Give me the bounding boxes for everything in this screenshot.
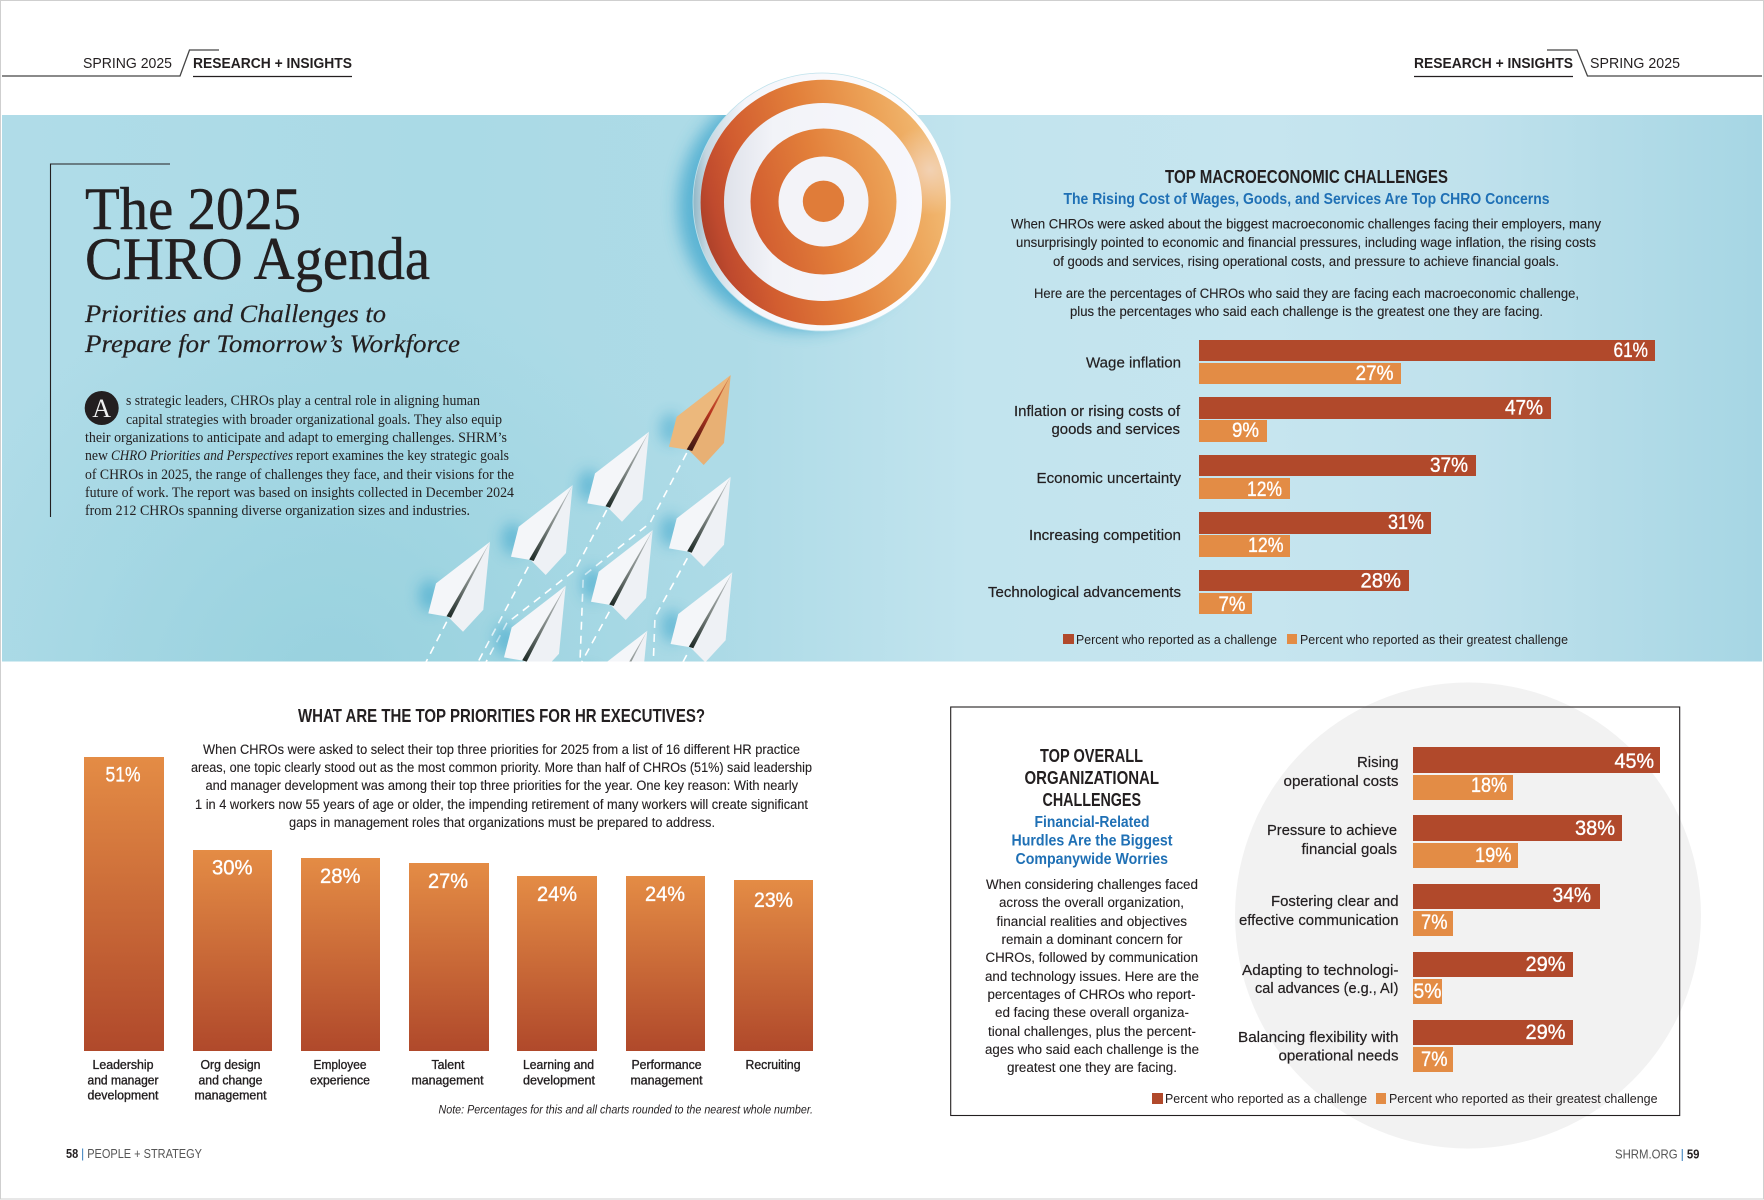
column: talent management: Talent <box>432 1058 465 1072</box>
article body: future of work. The report was based on insights collected in December 2024 <box>85 485 515 501</box>
column chart <box>84 757 813 1102</box>
column: leadership: development <box>88 1088 159 1102</box>
row: economic uncertainty: 37% <box>1430 454 1468 477</box>
description: When considering challenges faced <box>986 877 1198 892</box>
description <box>1011 216 1601 319</box>
column: org design: and change <box>198 1074 263 1088</box>
column: performance management: Performance <box>632 1058 702 1072</box>
column: leadership: and manager <box>88 1074 158 1088</box>
description: CHROs, followed by communication <box>986 950 1198 965</box>
note: Note: Percentages for this and all charts rounded to the nearest whole number. <box>438 1104 813 1116</box>
subtitle: Prepare for Tomorrow’s Workforce <box>84 331 460 358</box>
row: adapting to technological advances <box>1242 952 1573 1004</box>
column: learning and development: 24% <box>537 883 577 906</box>
column: leadership: 51% <box>106 764 140 786</box>
description: plus the percentages who said each challenge is the greatest one they are facing. <box>1070 304 1543 319</box>
row: technological advancements: 28% <box>1360 570 1401 592</box>
column: employee experience <box>301 858 380 1088</box>
legend: Percent who reported as their greatest challenge <box>1389 1092 1658 1106</box>
icon: target bullseye <box>678 73 951 331</box>
row: increasing competition: 12% <box>1248 534 1284 557</box>
decorative gray circle <box>1235 682 1701 1148</box>
legend: Percent who reported as their greatest challenge <box>1300 633 1568 647</box>
column: talent management: 27% <box>428 870 468 893</box>
bar chart: macroeconomic <box>988 339 1655 616</box>
column: learning and development: Learning and <box>523 1058 594 1072</box>
row: pressure to achieve financial goals: Pressure to achieve <box>1267 823 1397 839</box>
column: org design: 30% <box>212 856 252 880</box>
column: learning and development: development <box>523 1074 596 1088</box>
row: economic uncertainty: 12% <box>1247 478 1282 501</box>
icon: drop cap <box>85 391 119 425</box>
header: right: RESEARCH + INSIGHTS <box>1414 56 1573 72</box>
description: across the overall organization, <box>999 895 1184 910</box>
heading: CHALLENGES <box>1042 789 1141 810</box>
subheading: Companywide Worries <box>1016 851 1168 868</box>
column: org design <box>193 850 272 1102</box>
description <box>985 877 1199 1075</box>
description: greatest one they are facing. <box>1007 1060 1177 1075</box>
description: gaps in management roles that organizations must be prepared to address. <box>289 815 715 830</box>
row: inflation or rising costs: 9% <box>1232 419 1259 442</box>
article body <box>85 393 515 519</box>
row: fostering clear and effective communication: 7% <box>1421 911 1448 934</box>
panel: top priorities for HR executives <box>84 705 813 1116</box>
description: areas, one topic clearly stood out as the most common priority. More than half of CHROs (51%) said leadership <box>191 760 812 775</box>
column: recruiting: 23% <box>754 889 793 912</box>
row: increasing competition <box>1029 511 1431 557</box>
article body: capital strategies with broader organizational goals. They also equip <box>126 412 502 428</box>
article body: s strategic leaders, CHROs play a central role in aligning human <box>126 393 481 409</box>
title: The 2025 <box>85 176 301 242</box>
description: 1 in 4 workers now 55 years of age or older, the impending retirement of many workers will create significant <box>195 797 808 812</box>
panel: top macroeconomic challenges <box>988 166 1655 647</box>
column: talent management: management <box>412 1074 484 1088</box>
row: fostering clear and effective communication <box>1239 884 1600 936</box>
column: org design: management <box>194 1088 267 1102</box>
row: balancing flexibility: Balancing flexibility with <box>1238 1030 1398 1046</box>
article body: from 212 CHROs spanning diverse organization sizes and industries. <box>85 503 470 519</box>
article body: new <box>85 448 108 464</box>
article body: CHRO Priorities and Perspectives <box>111 448 293 464</box>
row: rising operational costs: operational costs <box>1284 774 1398 790</box>
header: left: SPRING 2025 <box>83 56 172 72</box>
row: inflation or rising costs: goods and services <box>1052 422 1180 438</box>
column: leadership: Leadership <box>92 1058 154 1072</box>
panel border <box>951 707 1680 1116</box>
header: left: RESEARCH + INSIGHTS <box>193 56 352 72</box>
description: and manager development was among their top three priorities for the year. One key reason: With nearly <box>206 778 798 793</box>
row: inflation or rising costs <box>1014 396 1551 442</box>
title: CHRO Agenda <box>85 226 430 292</box>
article body: report examines the key strategic goals <box>296 448 509 464</box>
intro frame and article <box>50 164 515 519</box>
legend: Percent who reported as a challenge <box>1076 633 1277 647</box>
icon: paper planes with dashed flight paths <box>413 375 732 662</box>
row: adapting to technological advances: cal advances (e.g., AI) <box>1255 981 1398 997</box>
row: balancing flexibility: 29% <box>1526 1021 1566 1044</box>
description: ages who said each challenge is the <box>985 1042 1199 1057</box>
row: fostering clear and effective communication: Fostering clear and <box>1271 894 1398 910</box>
heading: TOP OVERALL <box>1040 745 1143 766</box>
row: wage inflation <box>1086 339 1655 385</box>
subheading <box>1012 814 1173 868</box>
row: pressure to achieve financial goals: financial goals <box>1302 842 1397 858</box>
header: left <box>2 50 352 76</box>
row: wage inflation: Wage inflation <box>1086 356 1181 372</box>
article body: of CHROs in 2025, the range of challenges they face, and their visions for the <box>85 467 514 483</box>
row: adapting to technological advances: Adapting to technologi- <box>1242 963 1399 979</box>
title <box>85 176 430 292</box>
row: balancing flexibility: operational needs <box>1278 1048 1398 1064</box>
heading: TOP MACROECONOMIC CHALLENGES <box>1165 166 1448 187</box>
heading <box>1024 745 1159 810</box>
row: inflation or rising costs: Inflation or rising costs of <box>1014 404 1181 420</box>
article body: their organizations to anticipate and adapt to emerging challenges. SHRM’s <box>85 430 507 446</box>
description: percentages of CHROs who report- <box>988 987 1196 1002</box>
description: unsurprisingly pointed to economic and financial pressures, including wage inflation, the rising costs <box>1016 235 1596 250</box>
row: pressure to achieve financial goals: 38% <box>1575 817 1615 840</box>
column: employee experience: Employee <box>314 1058 367 1072</box>
subtitle: Priorities and Challenges to <box>84 301 386 328</box>
icon: drop cap: A <box>92 394 111 423</box>
row: rising operational costs: 18% <box>1471 774 1507 797</box>
row: pressure to achieve financial goals: 19% <box>1475 844 1512 867</box>
column: recruiting <box>734 880 813 1072</box>
row: economic uncertainty: Economic uncertainty <box>1036 471 1182 487</box>
row: fostering clear and effective communication: 34% <box>1552 884 1591 907</box>
row: adapting to technological advances: 5% <box>1414 980 1442 1003</box>
row: adapting to technological advances: 29% <box>1526 953 1566 976</box>
heading: ORGANIZATIONAL <box>1024 767 1159 788</box>
column: employee experience: experience <box>310 1074 370 1088</box>
description: When CHROs were asked about the biggest macroeconomic challenges facing their employers, many <box>1011 216 1601 232</box>
subtitle <box>84 301 460 358</box>
description: Here are the percentages of CHROs who said they are facing each macroeconomic challenge, <box>1034 286 1579 301</box>
column: learning and development <box>517 876 597 1088</box>
footer: right: SHRM.ORG | 59 <box>1615 1148 1700 1162</box>
row: technological advancements: Technological advancements <box>988 585 1181 601</box>
description <box>191 742 812 830</box>
legend: Percent who reported as a challenge <box>1165 1092 1367 1106</box>
row: economic uncertainty <box>1036 454 1476 501</box>
description: tional challenges, plus the percent- <box>988 1024 1196 1039</box>
row: balancing flexibility: 7% <box>1421 1048 1448 1071</box>
description: of goods and services, rising operational costs, and pressure to achieve financial goals. <box>1053 254 1559 269</box>
row: balancing flexibility <box>1238 1020 1573 1072</box>
row: wage inflation: 27% <box>1356 362 1394 385</box>
row: increasing competition: Increasing competition <box>1029 528 1181 544</box>
footer: left: 58 | PEOPLE + STRATEGY <box>66 1147 203 1161</box>
legend <box>1063 633 1568 647</box>
column: leadership <box>84 757 164 1102</box>
header: right: SPRING 2025 <box>1590 56 1680 72</box>
description: When CHROs were asked to select their top three priorities for 2025 from a list of 16 different HR practice <box>203 742 800 757</box>
column: performance management: management <box>630 1074 703 1088</box>
description: financial realities and objectives <box>996 914 1187 929</box>
row: rising operational costs: Rising <box>1357 755 1398 771</box>
row: pressure to achieve financial goals <box>1267 815 1622 868</box>
row: rising operational costs <box>1284 747 1660 800</box>
column: talent management <box>409 863 489 1088</box>
column: recruiting: Recruiting <box>746 1058 801 1072</box>
header: right <box>1414 50 1762 76</box>
subheading: The Rising Cost of Wages, Goods, and Services Are Top CHRO Concerns <box>1064 191 1550 208</box>
row: increasing competition: 31% <box>1388 511 1424 534</box>
heading: WHAT ARE THE TOP PRIORITIES FOR HR EXECUTIVES? <box>298 705 705 726</box>
panel: top overall organizational challenges <box>951 682 1701 1148</box>
subheading: Hurdles Are the Biggest <box>1012 832 1173 850</box>
column: performance management <box>626 876 705 1088</box>
row: technological advancements <box>988 570 1409 616</box>
row: fostering clear and effective communication: effective communication <box>1239 913 1398 929</box>
description: ed facing these overall organiza- <box>995 1005 1189 1020</box>
panel: blue hero background <box>2 115 1762 662</box>
description: remain a dominant concern for <box>1002 932 1183 947</box>
description: and technology issues. Here are the <box>985 969 1199 984</box>
bar chart: organizational <box>1238 747 1660 1072</box>
subheading: Financial-Related <box>1034 814 1150 831</box>
row: wage inflation: 61% <box>1614 339 1648 362</box>
legend <box>1152 1092 1658 1106</box>
row: inflation or rising costs: 47% <box>1505 396 1543 420</box>
row: technological advancements: 7% <box>1218 593 1246 616</box>
row: rising operational costs: 45% <box>1614 750 1654 773</box>
column: org design: Org design <box>200 1058 261 1072</box>
column: employee experience: 28% <box>320 865 360 888</box>
column: performance management: 24% <box>645 883 685 906</box>
